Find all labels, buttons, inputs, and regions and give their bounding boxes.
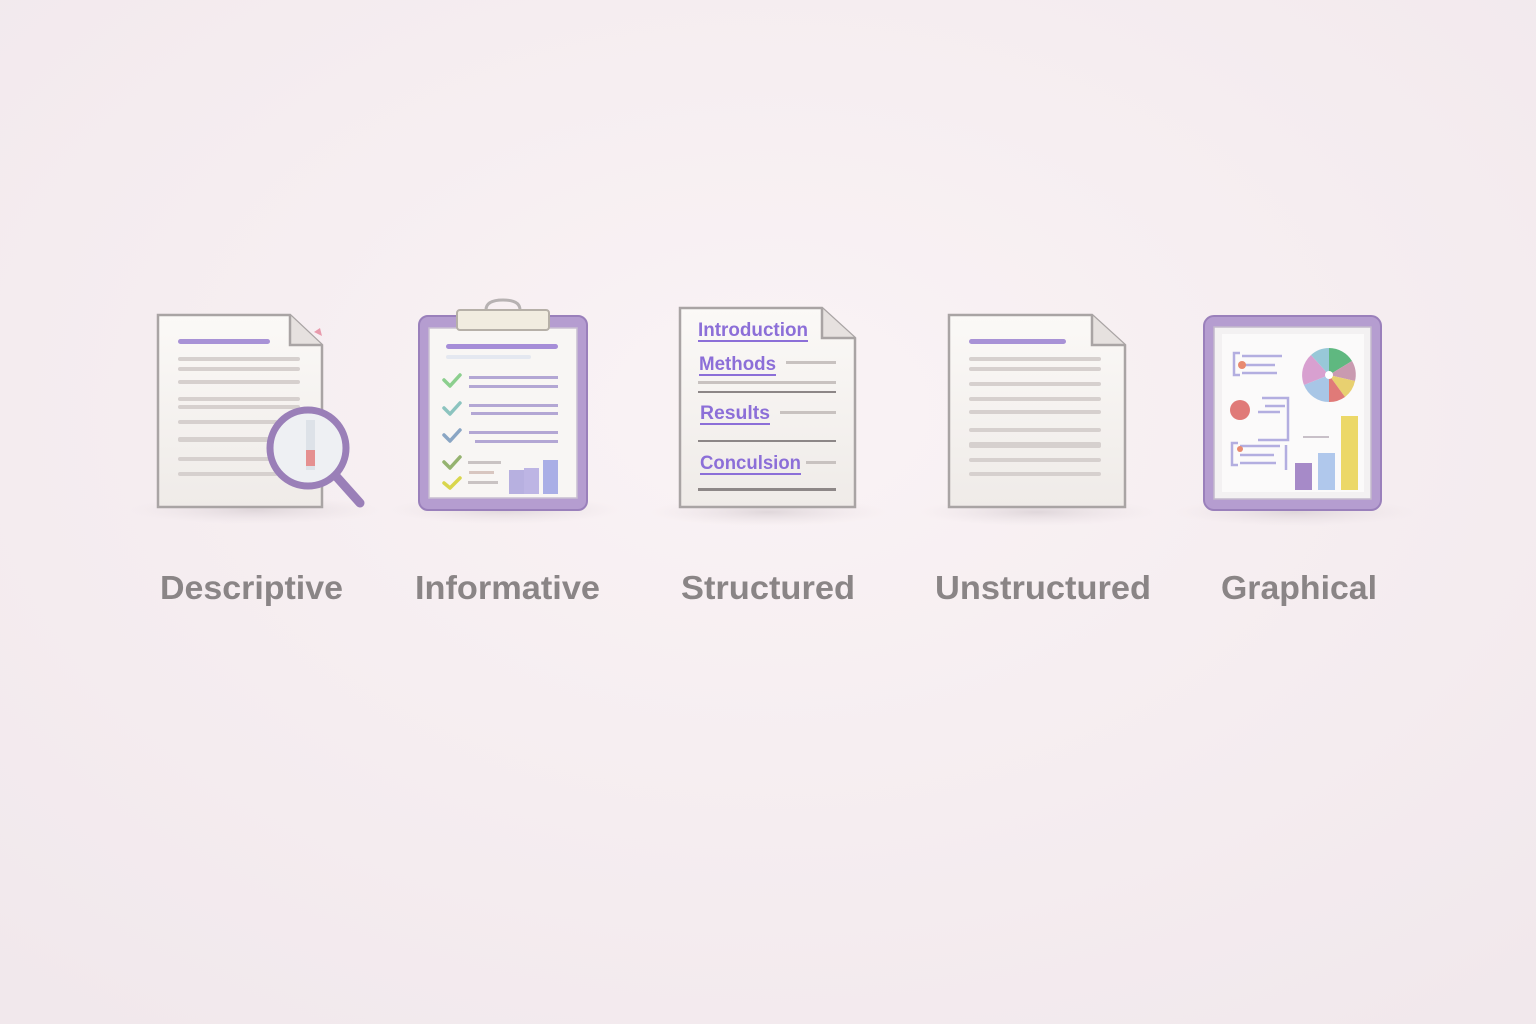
icon: informative clipboard <box>419 300 587 510</box>
labels <box>160 569 1377 606</box>
icon: descriptive document with magnifier <box>158 315 360 507</box>
icon: structured document: Introduction <box>698 320 808 341</box>
icon: unstructured document <box>949 315 1125 507</box>
icon: structured document: Methods <box>699 354 776 375</box>
label: Structured: Structured <box>681 569 855 606</box>
label: Graphical: Graphical <box>1221 569 1377 606</box>
label: Unstructured: Unstructured <box>935 569 1151 606</box>
icon: graphical dashboard <box>1204 316 1381 510</box>
icon: structured document: Conculsion <box>700 453 801 474</box>
icon: structured document: Results <box>700 403 770 424</box>
icon: structured document <box>680 308 855 507</box>
label: Informative: Informative <box>415 569 600 606</box>
label: Descriptive: Descriptive <box>160 569 343 606</box>
shadows <box>130 496 1415 526</box>
